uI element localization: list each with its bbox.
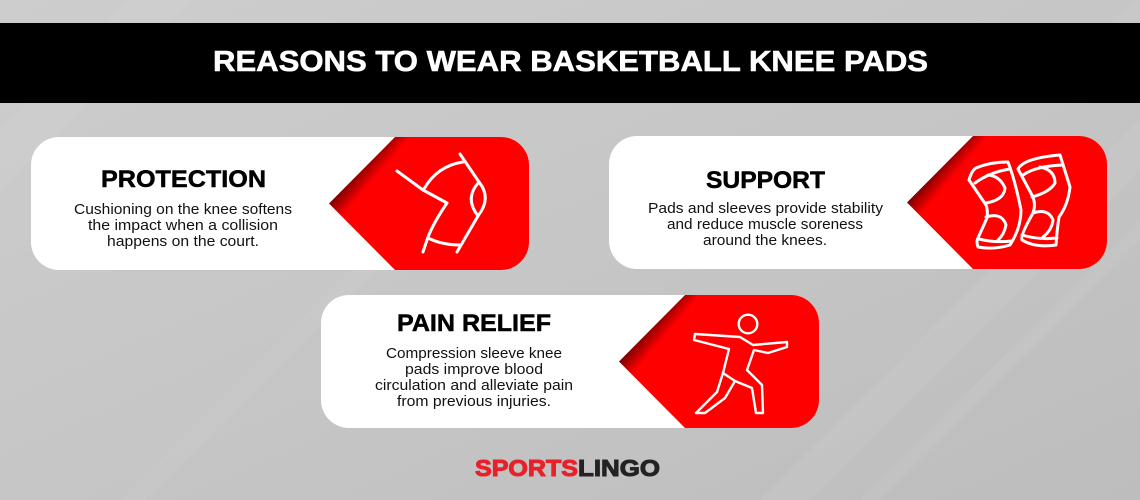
card background <box>321 295 819 428</box>
logo: SPORTS <box>475 455 578 481</box>
description: from previous injuries. <box>397 393 551 410</box>
panel: pain relief <box>321 295 819 428</box>
description: happens on the court. <box>107 233 259 250</box>
description: Compression sleeve knee <box>386 345 562 362</box>
heading: PROTECTION <box>101 166 266 193</box>
logo <box>475 455 660 481</box>
logo: LINGO <box>578 455 660 481</box>
description: the impact when a collision <box>88 217 278 234</box>
description: Cushioning on the knee softens <box>74 201 292 218</box>
panel: protection <box>31 137 529 270</box>
card background <box>31 137 529 270</box>
heading: SUPPORT <box>706 167 825 194</box>
description: circulation and alleviate pain <box>375 377 573 394</box>
red arrow block <box>907 136 1107 269</box>
icon: pair of knee sleeves <box>969 155 1070 248</box>
description <box>648 200 884 249</box>
heading: PAIN RELIEF <box>397 310 551 337</box>
description: around the knees. <box>703 232 827 249</box>
description: pads improve blood <box>405 361 543 378</box>
header banner <box>0 23 1140 103</box>
red arrow block <box>329 137 529 270</box>
card background <box>609 136 1107 269</box>
description: and reduce muscle soreness <box>667 216 863 233</box>
description <box>74 201 292 250</box>
panel: support <box>609 136 1107 269</box>
icon: athlete lunging <box>694 315 787 413</box>
title: REASONS TO WEAR BASKETBALL KNEE PADS <box>213 46 928 78</box>
icon: knee joint <box>397 154 485 252</box>
red arrow block <box>619 295 819 428</box>
description <box>375 345 573 410</box>
description: Pads and sleeves provide stability <box>648 200 884 217</box>
